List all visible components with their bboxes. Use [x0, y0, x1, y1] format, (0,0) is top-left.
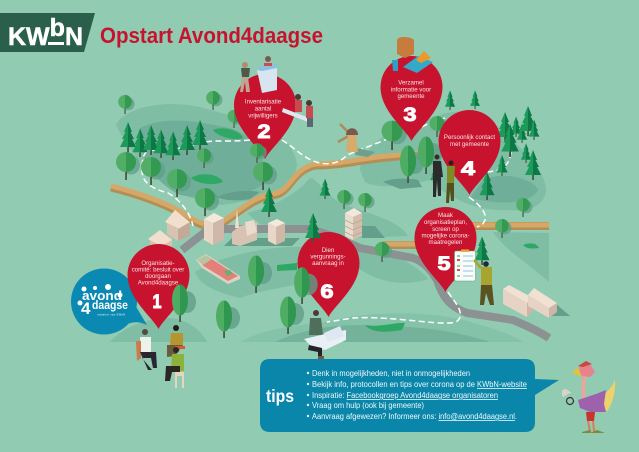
icon: checklist	[454, 250, 476, 281]
hill: inner dark	[139, 121, 264, 198]
tips heading: tips	[266, 386, 294, 406]
pin 4 text: met gemeente	[450, 141, 490, 148]
pin 2 text: vrijwilligers	[248, 112, 278, 120]
pin 6 text: aanvraag in	[312, 260, 344, 267]
logo dots	[78, 284, 122, 306]
tips list	[307, 369, 528, 421]
logo word: avond: avond	[82, 288, 122, 303]
logo subtitle: initiatief van KWbN	[97, 314, 125, 316]
building: flat right	[528, 288, 557, 318]
pin 4 number: 4	[461, 159, 476, 180]
building: house upper	[165, 210, 190, 241]
people: registration desk	[240, 56, 277, 93]
pin 5 text: Maak	[438, 212, 454, 219]
pin 1 text: comité: besluit over	[132, 266, 184, 274]
logo KWbN	[0, 13, 95, 52]
tips list: Aanvraag afgewezen? Informeer ons: info@avond4daagse.nl.	[312, 412, 517, 421]
icon: backpack and map	[392, 37, 433, 73]
people: seated committee	[136, 325, 185, 388]
people: table with volunteers	[282, 94, 313, 127]
pin 2 text: aantal	[255, 106, 271, 112]
hill: bottom centre dark	[275, 325, 490, 342]
hill: gravel side	[346, 246, 428, 283]
title: Opstart Avond4daagse	[100, 23, 323, 48]
pin 5 text: organisatieplan,	[424, 219, 467, 226]
pin 1 number: 1	[152, 292, 162, 313]
logo KWbN: KW	[8, 23, 50, 51]
pin 5 text: mogelijke corona-	[421, 232, 470, 240]
bushes	[191, 128, 539, 332]
pin 1 text: Organisatie-	[141, 260, 175, 267]
building: block	[204, 213, 224, 245]
ground shadows	[217, 179, 570, 316]
pin 3 number: 3	[404, 105, 416, 126]
building: office	[268, 219, 285, 245]
pin 4	[433, 110, 500, 203]
building: church	[232, 209, 257, 246]
logo word: daagse: daagse	[92, 300, 128, 312]
hill: centre	[247, 178, 408, 238]
pin 3	[380, 37, 442, 141]
pin 3 text: informatie voor	[391, 86, 431, 94]
tan road right	[383, 226, 549, 245]
hill: below tan road	[493, 232, 549, 282]
person with checklist	[474, 260, 494, 305]
pin 6 number: 6	[320, 282, 334, 303]
pin 6 text: vergunnings-	[310, 254, 346, 260]
hill: bottom centre	[240, 313, 523, 342]
pin 2 text: Inventarisatie	[245, 98, 282, 106]
hill: top left	[116, 104, 297, 205]
tips list: Vraag om hulp (ook bij gemeente)	[312, 401, 424, 410]
tree overlapping pin 1	[172, 284, 196, 322]
building: flat left	[503, 285, 533, 317]
pin 4 text: Persoonlijk contact	[444, 134, 495, 141]
pin 5	[414, 207, 494, 305]
tips list: Inspiratie: Facebookgroep Avond4daagse organisatoren	[312, 391, 498, 400]
pin 5 text: screen op	[432, 226, 459, 233]
tree on pin 2	[250, 143, 267, 163]
white dashed route	[142, 117, 511, 323]
tree overlapping pin 6	[294, 267, 318, 304]
pin 5 text: maatregelen	[429, 239, 462, 246]
map landscape	[110, 104, 570, 342]
hill: sports field surroundings	[195, 247, 346, 298]
hill: right	[360, 112, 546, 210]
bubble: Avond4daagse logo	[71, 268, 147, 334]
gray road	[182, 229, 549, 338]
logo KWbN: b	[50, 14, 65, 42]
person with laptop	[304, 310, 346, 364]
sports field	[196, 254, 240, 284]
logo numeral: 4: 4	[81, 299, 91, 318]
tan road left	[111, 188, 204, 226]
pin 1 text: Avond4daagse	[138, 280, 179, 286]
icon: windmill	[338, 124, 375, 157]
mascot: ostrich	[562, 361, 615, 433]
pin 3 text: gemeente	[397, 93, 425, 100]
panel: tips	[260, 359, 559, 432]
pin 2	[234, 56, 313, 163]
pin 2 number: 2	[258, 122, 270, 143]
hill: right dark	[470, 176, 538, 203]
pin 1 text: doorgaan	[145, 273, 171, 280]
pin 1	[128, 244, 196, 388]
pine on top of pin 6	[305, 213, 321, 243]
pin 5 number: 5	[438, 254, 451, 275]
logo KWbN: N	[65, 23, 83, 51]
pin 6	[294, 213, 360, 364]
trees	[116, 90, 541, 338]
buildings	[148, 208, 557, 318]
pin 3 text: Verzamel	[398, 80, 424, 86]
tan road centre	[222, 155, 420, 224]
people: handshake	[433, 154, 455, 203]
building: house lower	[148, 230, 172, 253]
tips list: Bekijk info, protocollen en tips over corona op de KWbN-website	[312, 380, 528, 389]
tips list: Denk in mogelijkheden, niet in onmogelijkheden	[312, 369, 470, 378]
building: tower	[345, 208, 362, 240]
pin 6 text: Dien	[322, 247, 334, 254]
hill: bottom left	[110, 318, 207, 342]
